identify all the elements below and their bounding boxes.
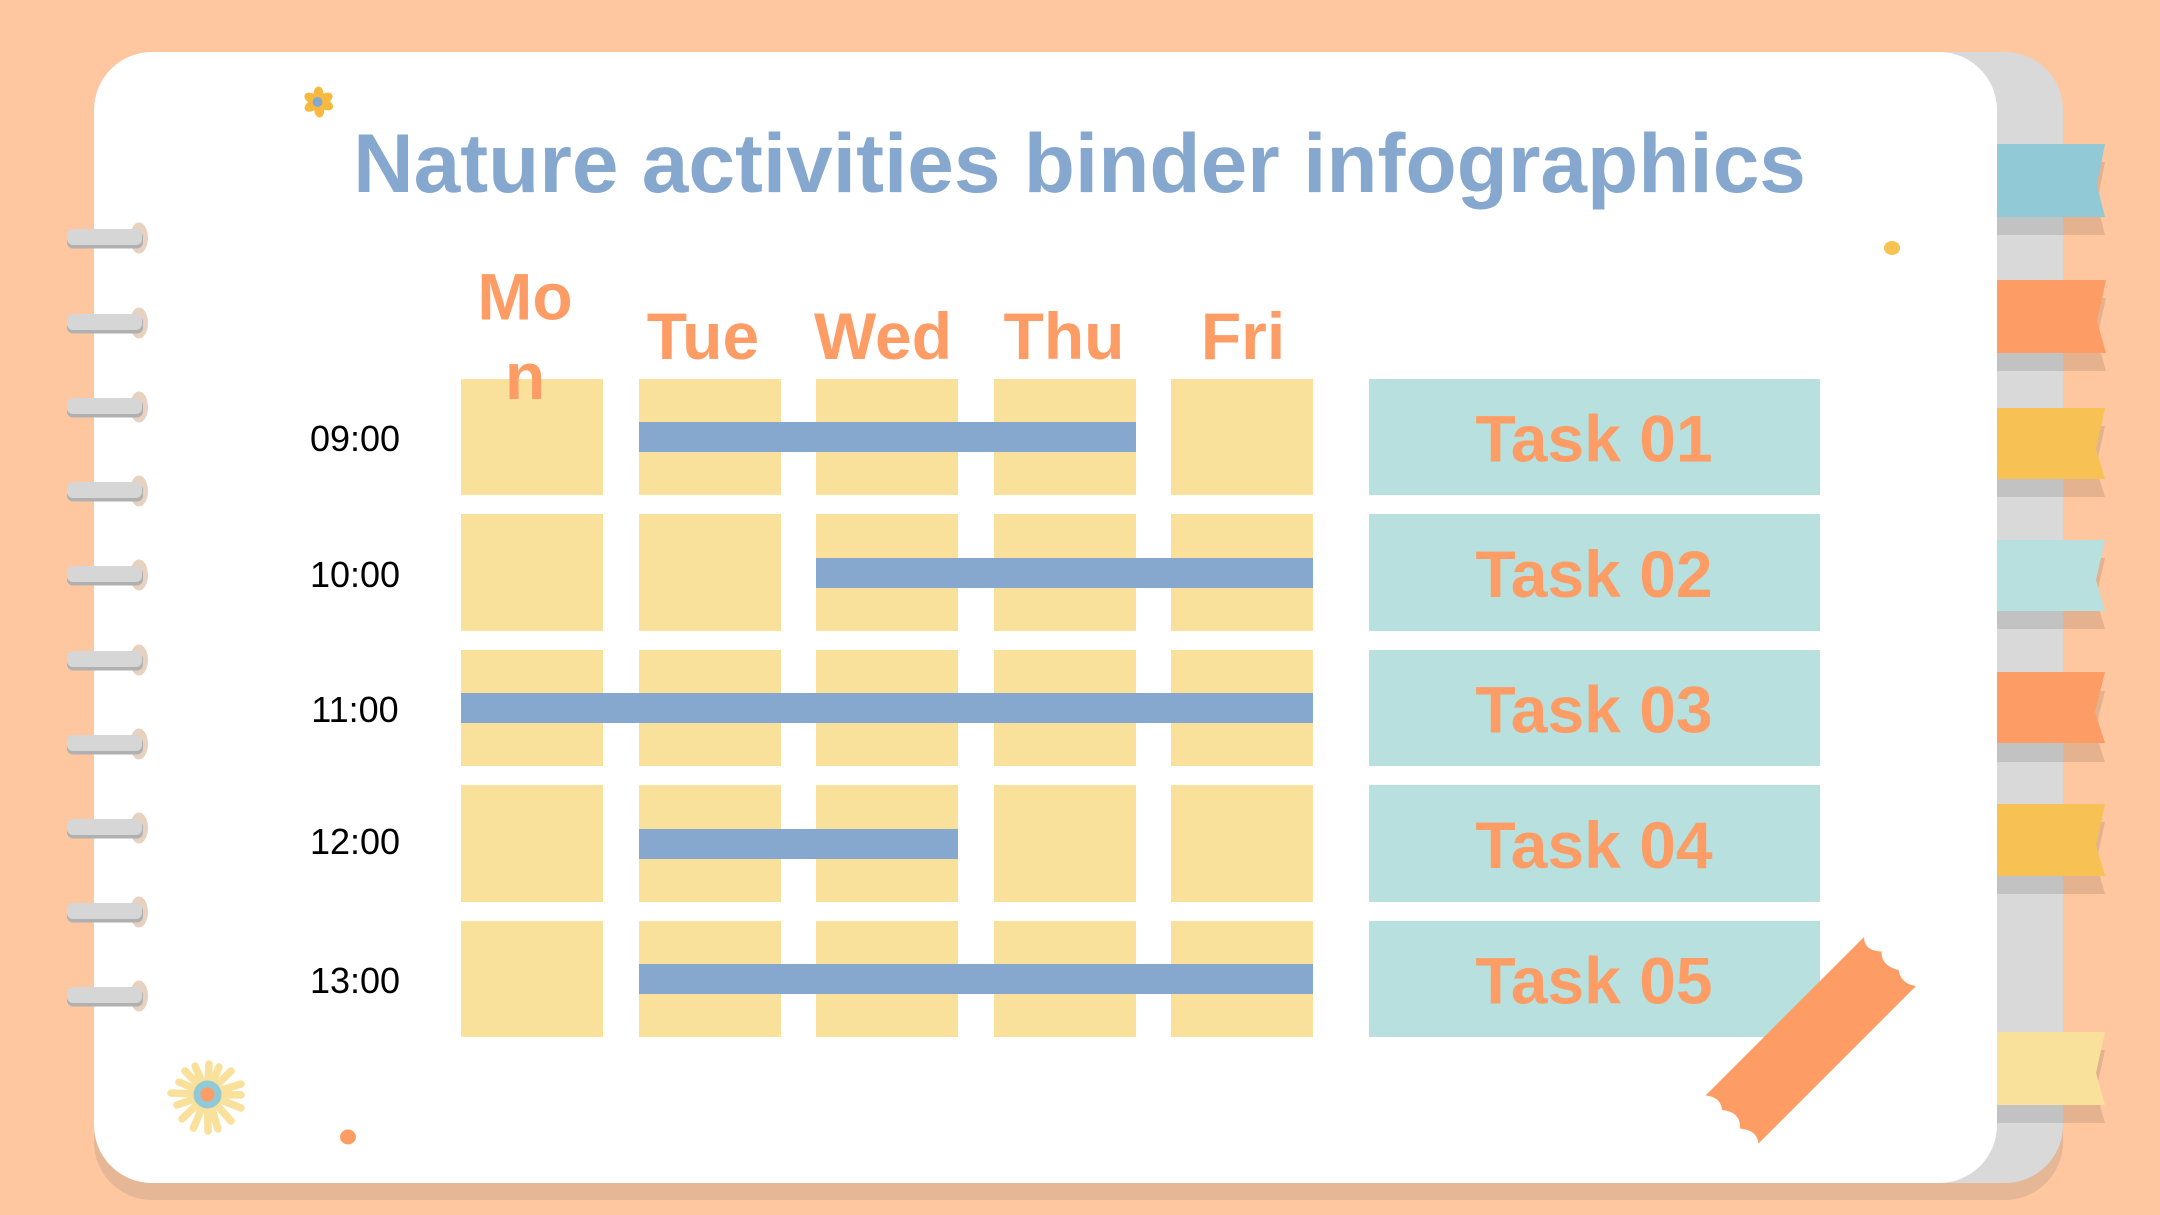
tab: pale yellow (1997, 1032, 2105, 1105)
tab: amber (1997, 408, 2105, 479)
ring 4 (67, 476, 148, 506)
day: Wed: Wed (814, 299, 952, 373)
task list (1369, 379, 1820, 1037)
time: 10:00: 10:00 (310, 554, 400, 595)
ring 6 (67, 644, 148, 676)
bar: task 01 (639, 422, 1136, 452)
day: Mon: n (505, 339, 545, 413)
day: Tue: Tue (647, 299, 759, 373)
task 05 (1369, 921, 1820, 1037)
task 02: Task 02 (1475, 537, 1713, 611)
decorative dot: yellow (1884, 241, 1900, 255)
ring 10 (67, 980, 148, 1012)
icon: sun flower (171, 1064, 241, 1131)
day: Thu: Thu (1004, 299, 1124, 373)
title: Nature activities binder infographics (353, 116, 1806, 210)
time: 13:00: 13:00 (310, 960, 400, 1001)
ring 3 (67, 392, 148, 422)
bar: task 03 (461, 693, 1313, 723)
ring 9 (67, 896, 148, 928)
icon: small flower (302, 86, 335, 118)
washi tape (1706, 937, 1916, 1144)
ring 2 (67, 308, 148, 338)
bar: task 02 (816, 558, 1313, 588)
ring 8 (67, 812, 148, 844)
tab shadows (1997, 162, 2106, 1123)
time: 11:00: 11:00 (311, 689, 399, 730)
bar: task 04 (639, 829, 958, 859)
tab: light teal (1997, 540, 2105, 611)
day headings (477, 260, 1285, 413)
tab: teal (1997, 144, 2105, 217)
tab: orange (1997, 672, 2105, 743)
ring 1 (67, 222, 148, 254)
task 03: Task 03 (1475, 672, 1713, 746)
ring 7 (67, 728, 148, 760)
task 01: Task 01 (1475, 402, 1713, 476)
time labels (310, 418, 400, 1001)
task 05: Task 05 (1475, 944, 1713, 1018)
binder back cover (1800, 52, 2063, 1183)
time: 12:00: 12:00 (310, 821, 400, 862)
task 04: Task 04 (1475, 808, 1713, 882)
task 03 (1369, 650, 1820, 766)
time: 09:00: 09:00 (310, 418, 400, 459)
bar: task 05 (639, 964, 1313, 994)
task 04 (1369, 785, 1820, 902)
ring 5 (67, 560, 148, 590)
day: Mon: Mo (477, 260, 573, 334)
tab: amber (1997, 804, 2105, 876)
decorative dot: orange (340, 1130, 356, 1144)
gantt bars (461, 422, 1313, 994)
binder rings (67, 222, 148, 1012)
tab: orange (1997, 280, 2106, 353)
day: Fri: Fri (1201, 299, 1285, 373)
schedule grid cells (461, 379, 1313, 1037)
task 02 (1369, 514, 1820, 631)
task 01 (1369, 379, 1820, 495)
